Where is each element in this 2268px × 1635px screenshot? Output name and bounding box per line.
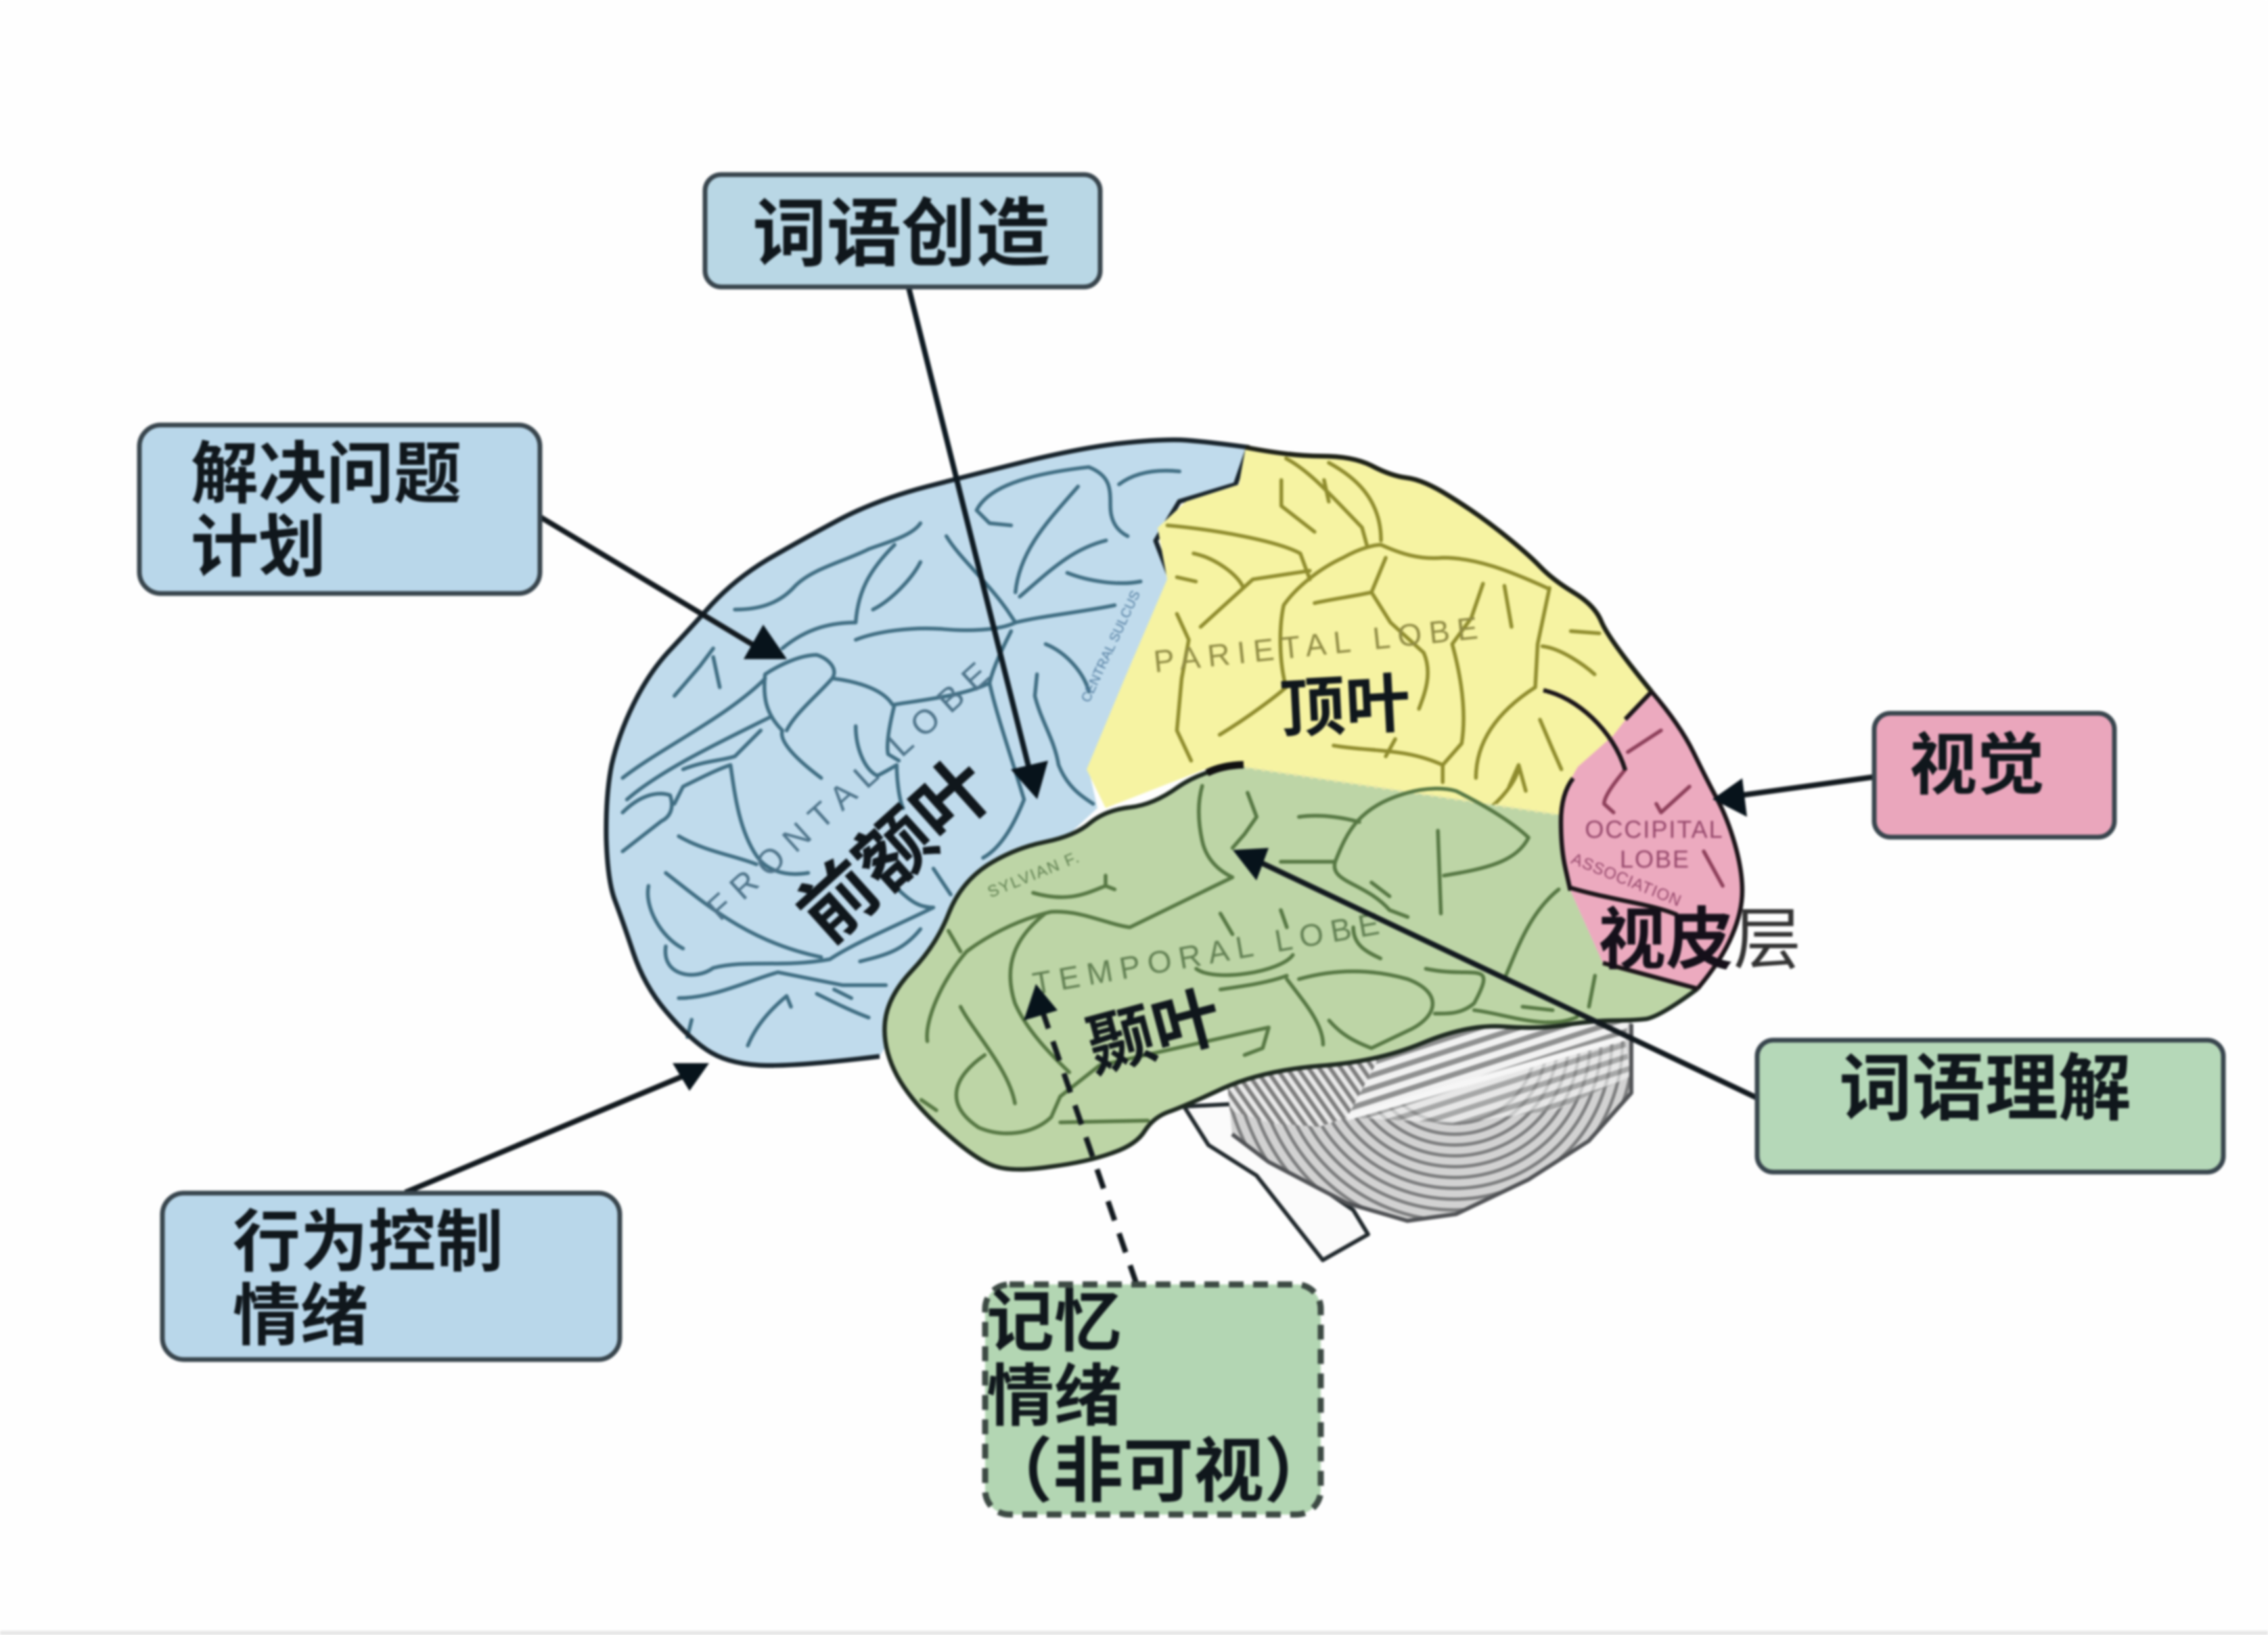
arrow: memory dashed bbox=[1024, 984, 1137, 1284]
label: occipital lobe second line: LOBE bbox=[1620, 845, 1690, 873]
box: word creation bbox=[705, 175, 1100, 287]
brainstem bbox=[1184, 1103, 1368, 1260]
frontal lobe bbox=[606, 440, 1248, 1065]
parietal lobe bbox=[1087, 447, 1652, 815]
label: association: ASSOCIATION bbox=[1568, 849, 1684, 910]
box: word comprehension bbox=[1757, 1040, 2223, 1172]
occipital lobe bbox=[1543, 690, 1742, 989]
label: frontal lobe Chinese: 前额叶 bbox=[782, 743, 1008, 958]
label: frontal lobe: FRONTAL LOBE bbox=[700, 648, 1004, 928]
box: word comprehension: 词语理解 bbox=[1839, 1048, 2131, 1129]
label: parietal lobe Chinese: 顶叶 bbox=[1279, 667, 1412, 746]
box: behaviour control and emotion bbox=[162, 1193, 620, 1360]
label: sylvian fissure: SYLVIAN F. bbox=[985, 848, 1083, 901]
box: word creation: 词语创造 bbox=[752, 193, 1050, 276]
label: occipital lobe: OCCIPITAL bbox=[1585, 815, 1724, 843]
arrow: word creation bbox=[909, 288, 1048, 799]
box: problem solving and planning: 计划 bbox=[191, 510, 326, 585]
brain illustration bbox=[606, 440, 1742, 1275]
label: temporal lobe Chinese: 颞叶 bbox=[1079, 979, 1229, 1087]
arrow: behaviour control bbox=[405, 1063, 709, 1192]
box: vision bbox=[1874, 713, 2114, 837]
box: behaviour control and emotion: 行为控制 bbox=[233, 1205, 503, 1280]
box: problem solving and planning: 解决问题 bbox=[191, 436, 461, 512]
arrow: problem solving bbox=[539, 516, 787, 659]
box: vision: 视觉 bbox=[1909, 727, 2045, 803]
box: memory and emotion, not visible: 记忆 bbox=[986, 1284, 1122, 1360]
small anatomical labels bbox=[700, 589, 1724, 1002]
box: memory and emotion, not visible: 情绪 bbox=[986, 1359, 1122, 1435]
arrow: word comprehension bbox=[1233, 848, 1756, 1098]
box: memory and emotion, not visible bbox=[982, 1284, 1334, 1515]
box: behaviour control and emotion: 情绪 bbox=[233, 1278, 368, 1354]
label: central sulcus: CENTRAL SULCUS bbox=[1079, 589, 1143, 704]
arrow: vision bbox=[1713, 777, 1874, 817]
box: problem solving and planning bbox=[139, 425, 540, 593]
cerebellum bbox=[1226, 1021, 1635, 1225]
label: temporal lobe: TEMPORAL LOBE bbox=[1030, 904, 1389, 1002]
temporal lobe bbox=[884, 765, 1698, 1169]
label: parietal lobe: PARIETAL LOBE bbox=[1152, 609, 1487, 679]
label: visual cortex: 视皮层 bbox=[1598, 902, 1801, 978]
box: memory and emotion, not visible: （非可视） bbox=[982, 1433, 1334, 1511]
